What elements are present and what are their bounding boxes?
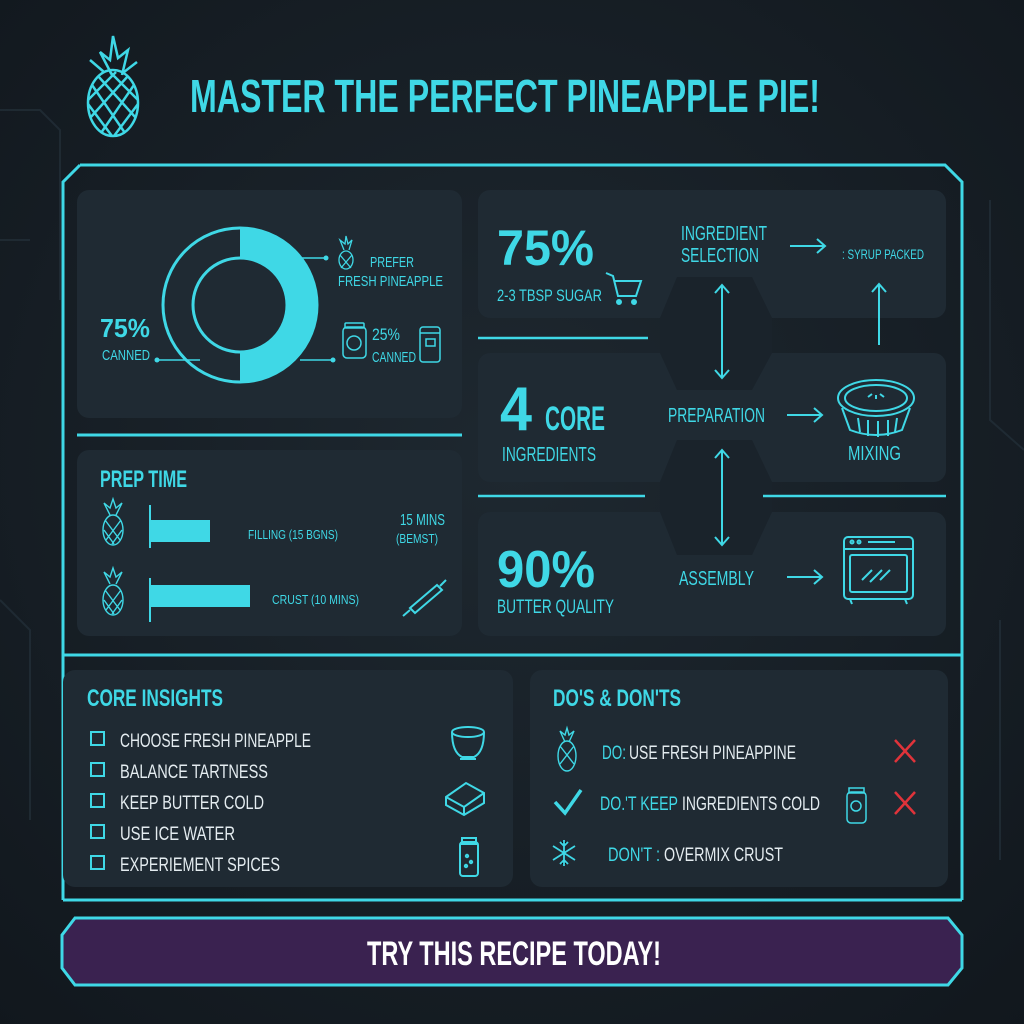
panel: core insights (63, 670, 513, 887)
checklist: BALANCE TARTNESS (120, 762, 268, 783)
label: prefer fresh pineapple (296, 236, 443, 290)
checklist (91, 731, 311, 876)
panel: prep time: FILLING (15 BGNS) (248, 527, 338, 542)
panel: do's and don'ts: DO'S & DON'TS (553, 685, 681, 712)
stat: 4 core ingredients: 4 (500, 375, 532, 444)
icon: oven (844, 537, 913, 604)
panel: prep time (77, 450, 462, 636)
row: don't overmix crust: DON'T : (608, 845, 660, 866)
bar: filling (150, 505, 210, 548)
stat: 90% butter: BUTTER QUALITY (497, 597, 614, 618)
label: 25% canned: CANNED (372, 349, 416, 366)
panel: core insights: CORE INSIGHTS (87, 685, 223, 712)
label: 15 mins: (BEMST) (396, 531, 438, 546)
main frame (63, 165, 962, 900)
checklist: EXPERIEMENT SPICES (120, 855, 280, 876)
icon: cart (606, 273, 641, 304)
label: 15 mins (396, 512, 445, 546)
icon: pineapple (103, 499, 123, 545)
label: prefer fresh pineapple: PREFER (370, 254, 414, 271)
stat: 4 core ingredients: CORE (545, 400, 605, 438)
step: preparation: PREPARATION (668, 405, 765, 427)
stat: 75% sugar: 2-3 TBSP SUGAR (497, 286, 602, 305)
icon: rolling pin (403, 580, 446, 616)
step: ingredient selection (681, 223, 767, 267)
stat: 75% sugar: 75% (497, 220, 594, 276)
stat: 4 core ingredients: INGREDIENTS (502, 444, 596, 466)
stat: 90% butter (497, 541, 614, 618)
label: 25% canned (300, 323, 440, 366)
row: do keep ingredients cold: INGREDIENTS COLD (682, 794, 820, 815)
label: 75% canned: 75% (100, 313, 150, 343)
icon: pineapple (103, 568, 123, 615)
label: 15 mins: 15 MINS (400, 512, 445, 529)
panel: stats and process: MIXING (848, 443, 901, 465)
panel: donut chart (77, 190, 462, 418)
step: ingredient selection: SELECTION (681, 245, 759, 267)
panel: stats and process (478, 190, 946, 636)
label: 25% canned: 25% (372, 325, 400, 344)
label: prefer fresh pineapple: FRESH PINEAPPLE (338, 273, 443, 290)
label: 75% canned (100, 313, 200, 364)
checklist: USE ICE WATER (120, 824, 235, 845)
stat: 90% butter: 90% (497, 541, 595, 599)
row: do use fresh pineapple (558, 728, 915, 771)
row: do use fresh pineapple: USE FRESH PINEAPPINE (629, 743, 796, 764)
row: don't overmix crust: OVERMIX CRUST (664, 845, 783, 866)
label: 75% canned: CANNED (102, 347, 150, 364)
row: don't overmix crust (553, 840, 783, 866)
row: do keep ingredients cold: DO.'T KEEP (600, 794, 678, 815)
icon: pie (838, 380, 914, 437)
stat: 4 core ingredients (500, 375, 605, 466)
panel: do's and don'ts (530, 670, 948, 887)
arrows (715, 239, 886, 584)
stat: 75% sugar (497, 220, 641, 305)
bar: crust (150, 578, 250, 622)
button: try this recipe today: TRY THIS RECIPE TODAY! (367, 935, 661, 973)
step: ingredient selection: INGREDIENT (681, 223, 767, 245)
icon: title pineapple (88, 36, 138, 136)
checklist: CHOOSE FRESH PINEAPPLE (120, 731, 311, 752)
panel: stats and process: : SYRUP PACKED (842, 246, 924, 262)
step: assembly: ASSEMBLY (679, 568, 754, 590)
row: do keep ingredients cold (555, 788, 915, 823)
row: do use fresh pineapple: DO: (602, 743, 626, 764)
panel: prep time: CRUST (10 MINS) (272, 592, 359, 607)
heading: prep time: PREP TIME (100, 466, 187, 493)
donut chart (163, 228, 317, 382)
checklist: KEEP BUTTER COLD (120, 793, 264, 814)
button: try this recipe today (62, 918, 962, 985)
icons: bowl, butter, spice jar (446, 727, 484, 876)
